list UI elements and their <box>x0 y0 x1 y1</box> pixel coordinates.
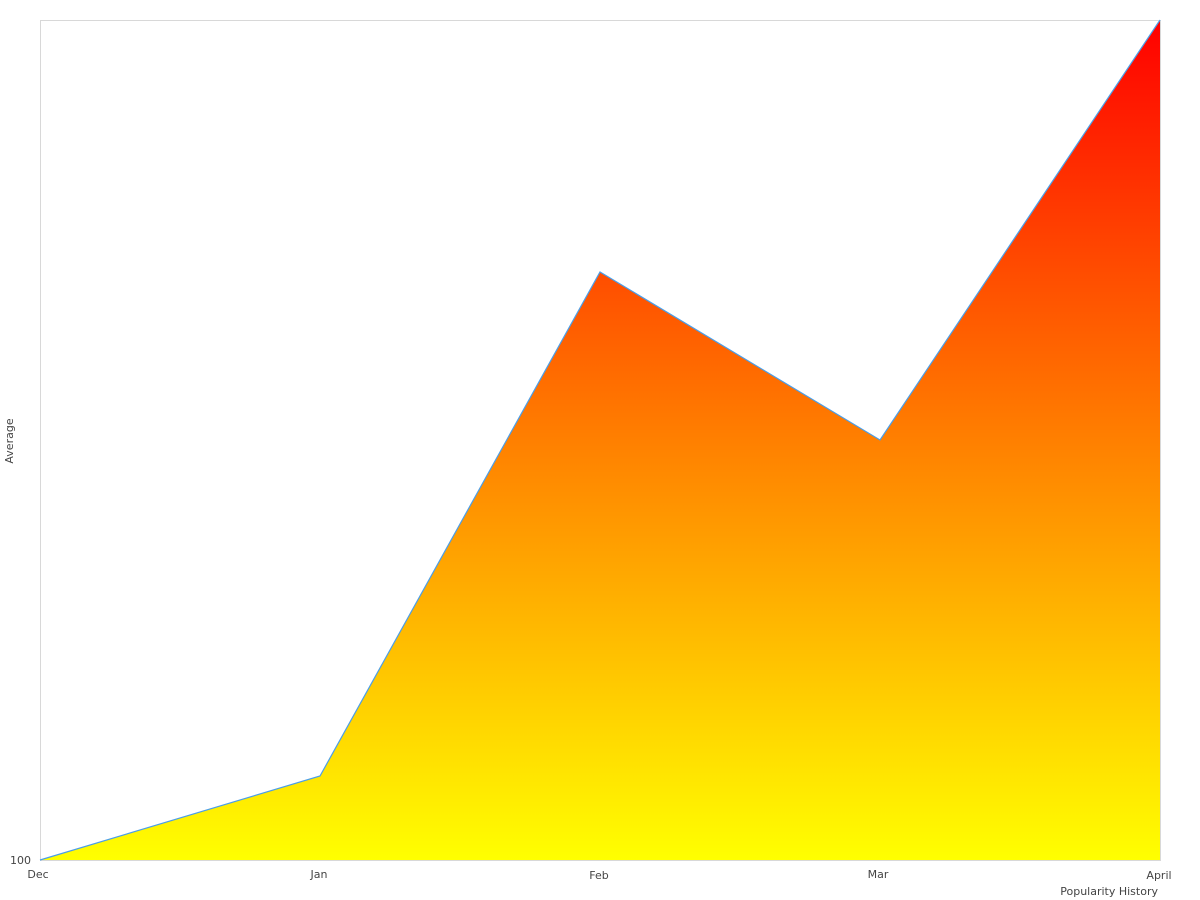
x axis labels: Dec <box>27 868 49 881</box>
x axis labels: Jan <box>310 868 328 881</box>
x axis labels <box>27 868 1172 882</box>
x axis title: Popularity History <box>1060 885 1158 898</box>
x axis labels: Feb <box>589 869 609 882</box>
y axis value label: 100 <box>10 854 31 867</box>
x axis labels: April <box>1146 869 1172 882</box>
x axis labels: Mar <box>868 868 889 881</box>
y axis title: Average <box>3 418 16 464</box>
